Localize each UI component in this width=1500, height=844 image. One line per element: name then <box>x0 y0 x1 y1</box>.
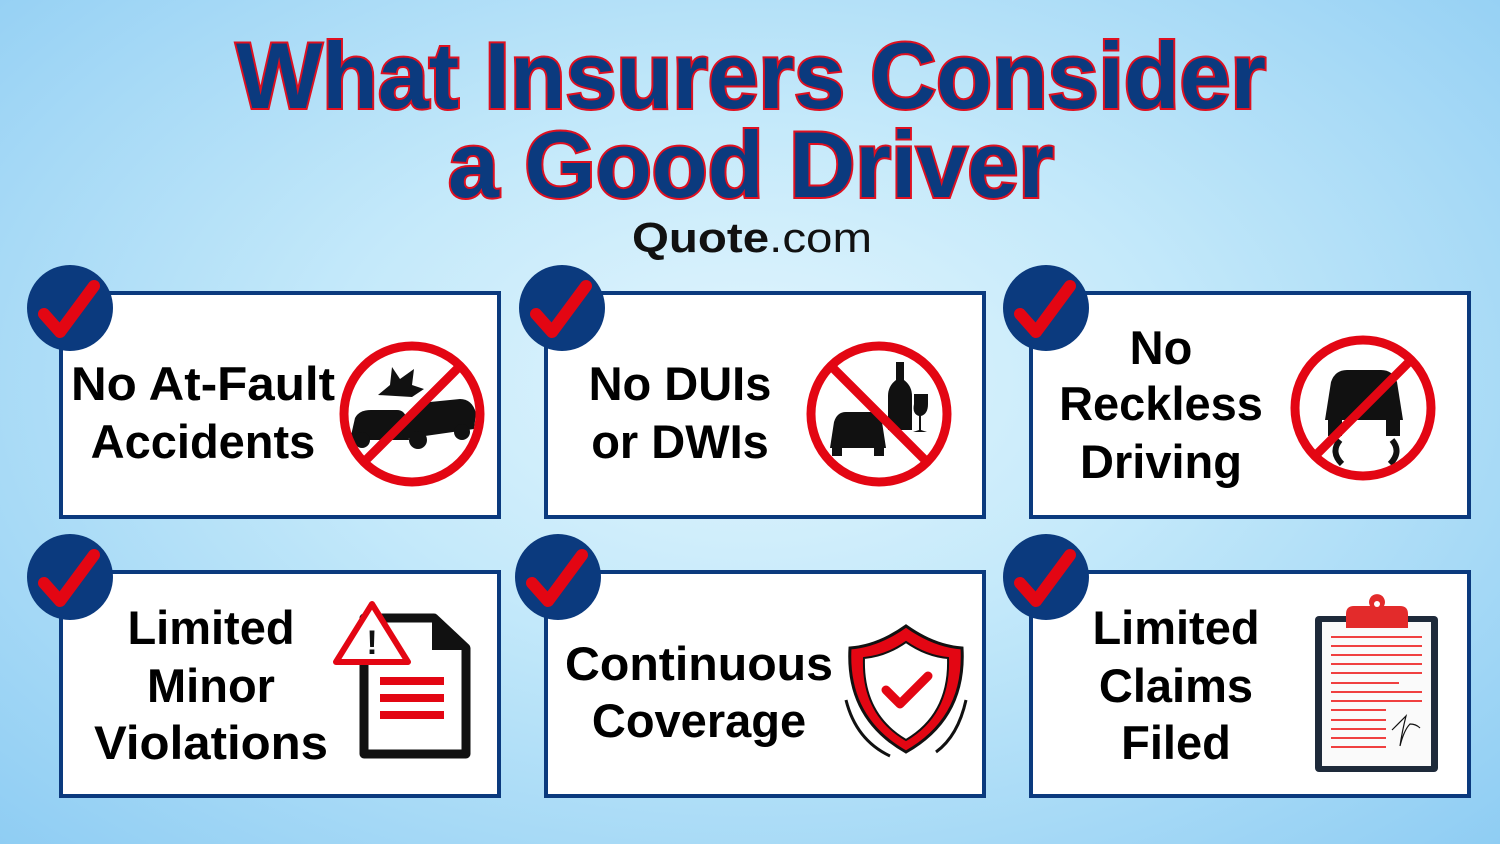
icon: check badge <box>519 265 605 351</box>
icon: check badge <box>515 534 601 620</box>
text: No At-Fault Accidents <box>71 357 335 468</box>
panel: no reckless driving <box>1003 265 1469 517</box>
text: No Reckless Driving <box>1059 321 1263 488</box>
text: No DUIs or DWIs <box>589 357 771 468</box>
text: No Reckless Driving: Reckless <box>1059 377 1263 430</box>
text: Limited Minor Violations: Limited <box>127 601 295 654</box>
text: Limited Claims Filed: Limited <box>1092 601 1260 654</box>
icon: warning document <box>336 604 466 754</box>
title: What Insurers Consider <box>236 23 1266 128</box>
icon: warning document: ! <box>366 624 378 662</box>
icon: check badge <box>27 534 113 620</box>
panel: no at-fault accidents <box>27 265 499 517</box>
icon: car and alcohol prohibited <box>811 346 947 482</box>
text: Continuous Coverage: Coverage <box>592 694 806 747</box>
text: No DUIs or DWIs: No DUIs <box>589 357 771 410</box>
text: No Reckless Driving: No <box>1130 321 1192 374</box>
icon: check badge <box>27 265 113 351</box>
logo: Quote.com: Quote .com <box>632 214 872 261</box>
text: No Reckless Driving: Driving <box>1080 435 1242 488</box>
icon: clipboard <box>1315 594 1438 772</box>
text: Limited Claims Filed: Filed <box>1121 716 1231 769</box>
panel: limited minor violations <box>27 534 499 796</box>
text: Limited Claims Filed: Claims <box>1099 659 1253 712</box>
text: Continuous Coverage <box>565 637 833 747</box>
text: Limited Minor Violations: Violations <box>94 716 328 769</box>
text: Limited Claims Filed <box>1092 601 1260 769</box>
icon: shield with check <box>846 626 966 756</box>
icon: check badge <box>1003 534 1089 620</box>
title: a Good Driver <box>448 112 1054 217</box>
text: Continuous Coverage: Continuous <box>565 637 833 690</box>
text: No DUIs or DWIs: or DWIs <box>591 415 769 468</box>
icon: crashed cars prohibited <box>344 346 480 482</box>
text: Limited Minor Violations <box>94 601 328 769</box>
panel: continuous coverage <box>515 534 984 796</box>
panel: limited claims filed <box>1003 534 1469 796</box>
icon: check badge <box>1003 265 1089 351</box>
title <box>236 23 1266 217</box>
icon: skidding car prohibited <box>1295 340 1431 476</box>
panel: no DUIs <box>519 265 984 517</box>
text: Limited Minor Violations: Minor <box>147 659 275 712</box>
text: No At-Fault Accidents: No At-Fault <box>71 357 335 410</box>
text: No At-Fault Accidents: Accidents <box>91 415 315 468</box>
